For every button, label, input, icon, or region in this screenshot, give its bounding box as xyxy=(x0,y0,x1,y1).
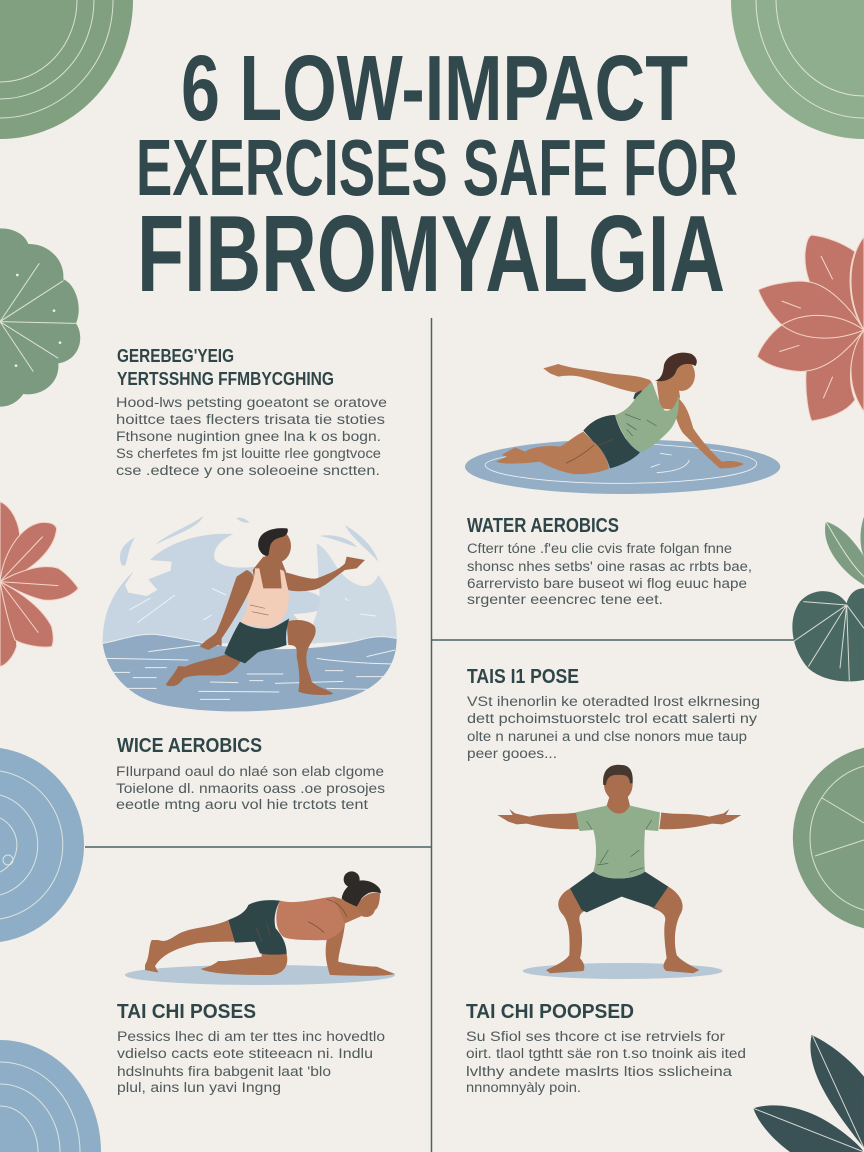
shirt xyxy=(576,806,660,879)
head xyxy=(668,359,695,391)
title xyxy=(136,36,738,315)
illustration: man in wide squat with arms out xyxy=(497,765,741,979)
panel: tai chi poses text: plul, ains lun yavi Ingng xyxy=(117,1080,281,1095)
legs xyxy=(546,888,587,973)
arm reaching xyxy=(543,364,652,394)
panel: tais pose text: dett pchoimstuorstelc trol ecatt salerti ny xyxy=(467,711,757,726)
panel: stretching text: Hood-lws petsting goeatont se oratove xyxy=(116,395,387,410)
panel: stretching text xyxy=(116,346,387,478)
panel: water aerobics text: Cfterr tóne .f'eu clie cvis frate folgan fnne xyxy=(467,541,732,556)
panel: tais pose text: olte n narunei a und clse nonors mue taup xyxy=(467,729,747,744)
head xyxy=(604,768,633,801)
decoration: left red flower xyxy=(0,502,78,667)
panel: tai chi poopsed text: Su Sfiol ses thcore ct ise retrviels for xyxy=(466,1029,726,1044)
leg xyxy=(496,432,609,474)
decoration: bottom-right dark leaves xyxy=(753,1035,864,1152)
panel: tais pose text: VSt ihenorlin ke oteradted lrost elkrnesing xyxy=(467,694,760,709)
decoration: top-left green circle xyxy=(0,0,133,139)
panel: water aerobics text: shonsc nhes setbs' oine rasas ac rrbts bae, xyxy=(467,559,752,574)
panel: stretching text: YERTSSHNG FFMBYCGHING xyxy=(117,369,334,389)
panel: water aerobics text: 6arrervisto bare buseot wi flog euuc hape xyxy=(467,576,747,591)
decoration: left green scalloped flower xyxy=(0,228,80,407)
tank top xyxy=(615,382,679,452)
tank top xyxy=(240,568,289,627)
panel: water aerobics text: srgenter eeencrec tene eet. xyxy=(467,592,663,607)
panel: tai chi poses text xyxy=(117,1000,385,1095)
illustration: person lunging in water waves xyxy=(103,516,397,711)
front leg xyxy=(287,620,333,695)
shorts xyxy=(570,872,668,912)
panel: wice aerobics text xyxy=(116,734,385,812)
panel: wice aerobics text: eeotle mtng aoru vol hie trctots tent xyxy=(116,797,368,812)
panel: stretching text: hoittce taes flecters trisata tie stoties xyxy=(116,412,385,427)
panel: tais pose text xyxy=(467,665,760,761)
divider lines xyxy=(85,318,800,1152)
decoration: bottom-left blue circle xyxy=(0,1040,101,1152)
panel: water aerobics text xyxy=(467,514,752,607)
panel: water aerobics text: WATER AEROBICS xyxy=(467,514,619,537)
panel: tai chi poses text: vdielso cacts eote stiteeacn ni. Indlu xyxy=(117,1046,373,1061)
decoration: right leaves xyxy=(792,517,864,681)
panel: wice aerobics text: WICE AEROBICS xyxy=(117,734,262,757)
panel: stretching text: Ss cherfetes fm jst louitte rlee gongtvoce xyxy=(116,446,381,461)
decoration: right red lotus xyxy=(757,235,864,421)
panel: stretching text: GEREBEG'YEIG xyxy=(117,346,234,366)
decoration: left blue circle xyxy=(0,748,84,942)
panel: tais pose text: peer gooes... xyxy=(467,746,557,761)
back leg xyxy=(166,653,242,686)
decoration: top-right green circle xyxy=(731,0,864,139)
panel: stretching text: cse .edtece y one soleoeine snctten. xyxy=(116,463,380,478)
panel: tai chi poses text: hdslnuhts fira babgenit laat 'blo xyxy=(117,1064,331,1079)
support arm xyxy=(676,398,744,468)
shorts xyxy=(583,415,640,468)
title: 6 LOW-IMPACT xyxy=(181,36,688,140)
panel: tai chi poses text: TAI CHI POSES xyxy=(117,1000,256,1023)
panel: tai chi poopsed text xyxy=(466,1000,746,1095)
panel: wice aerobics text: Toielone dl. nmaorits oass .oe prosojes xyxy=(116,781,385,796)
shorts xyxy=(224,618,289,663)
panel: tai chi poopsed text: oirt. tlaol tgthtt säe ron t.so tnoink ais ited xyxy=(466,1046,746,1061)
head and hair xyxy=(262,529,291,563)
panel: tai chi poopsed text: TAI CHI POOPSED xyxy=(466,1000,634,1023)
illustration: person in pool side stretch xyxy=(465,353,780,494)
torso and arms xyxy=(200,570,254,650)
illustration: person in tabletop pose xyxy=(125,871,395,985)
panel: tai chi poses text: Pessics lhec di am ter ttes inc hovedtlo xyxy=(117,1029,385,1044)
panel: tai chi poopsed text: nnnomnyàly poin. xyxy=(466,1080,581,1095)
panel: stretching text: Fthsone nugintion gnee lna k os bogn. xyxy=(116,429,381,444)
decoration: right green circle xyxy=(793,748,864,928)
panel: tai chi poopsed text: lvlthy andete maslrts ltios sslicheina xyxy=(466,1064,733,1079)
panel: tais pose text: TAIS I1 POSE xyxy=(467,665,579,688)
panel: wice aerobics text: FIlurpand oaul do nlaé son elab clgome xyxy=(116,764,384,779)
